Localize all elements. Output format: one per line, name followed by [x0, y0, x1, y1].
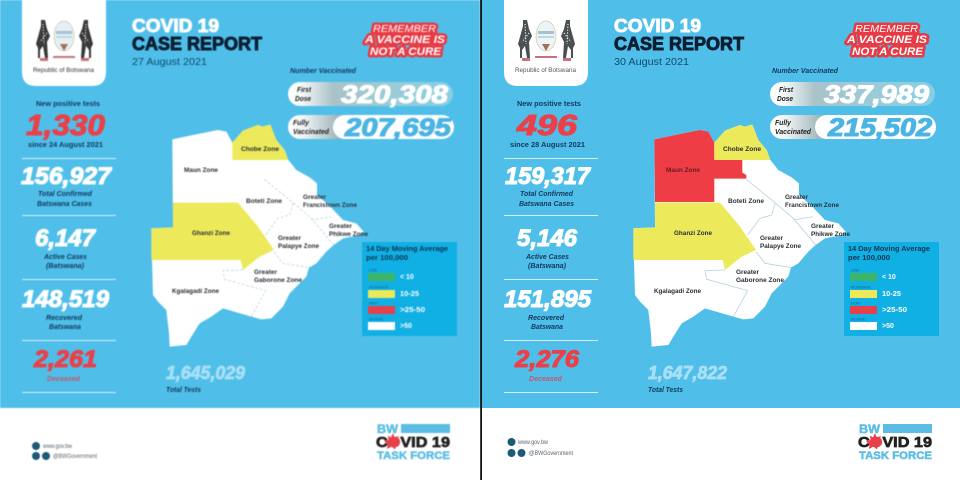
- pill: first dose: 320,308: [341, 81, 448, 109]
- map: Botswana zones: Kgalagadi Zone: [172, 288, 219, 295]
- map: Botswana zones: [633, 125, 850, 347]
- stat: deceased: 2,276: [514, 346, 580, 373]
- footer contacts: [508, 438, 573, 457]
- map: Botswana zones: Palapye Zone: [278, 243, 319, 250]
- callout: vaccine reminder: REMEMBER: [373, 24, 436, 35]
- legend: >25-50: [882, 307, 907, 314]
- stat: new positive tests: 1,330: [26, 110, 105, 142]
- footer contacts: www.gov.bw: [517, 440, 549, 446]
- title: CASE REPORT: [614, 34, 744, 54]
- stat: total confirmed: [21, 163, 113, 208]
- panel: 30 August report: [482, 0, 960, 480]
- stat: recovered: Recovered: [528, 315, 565, 322]
- logo: BW COVID 19 Task Force: BW: [377, 422, 399, 436]
- stat: active cases: 6,147: [35, 225, 97, 252]
- background: blue area: [482, 0, 960, 408]
- crest caption: Republic of Botswana: [33, 68, 95, 74]
- title: COVID 19: [614, 16, 701, 36]
- map: Botswana zones: Greater: [811, 223, 834, 230]
- callout: vaccine reminder: A VACCINE IS: [846, 34, 928, 46]
- stat: deceased: 2,261: [33, 346, 97, 373]
- map: Botswana zones: Chobe Zone: [723, 146, 761, 153]
- stat: new positive tests: since 28 August 2021: [510, 142, 585, 149]
- icon: crest: [518, 20, 575, 61]
- stat: total tests: Total Tests: [648, 387, 683, 394]
- logo: BW COVID 19 Task Force: TASK FORCE: [859, 450, 932, 462]
- stat: active cases: (Batswana): [528, 263, 567, 270]
- legend: 10-25: [400, 291, 419, 298]
- pill: fully vaccinated: Fully: [775, 120, 792, 127]
- stat: total confirmed: 156,927: [21, 163, 113, 190]
- callout: vaccine reminder: [364, 24, 446, 58]
- pill: fully vaccinated: Fully: [293, 120, 310, 127]
- callout: vaccine reminder: NOT A CURE: [370, 46, 442, 58]
- title: [614, 16, 744, 68]
- legend: LOW: [851, 268, 860, 272]
- legend: >50: [882, 323, 894, 330]
- pill: first dose: 337,989: [824, 81, 929, 109]
- map: Botswana zones: Ghanzi Zone: [192, 230, 230, 237]
- pill: first dose: Dose: [777, 96, 793, 103]
- map: Botswana zones: Boteti Zone: [246, 198, 282, 205]
- stat: active cases: Active Cases: [43, 254, 87, 261]
- map: Botswana zones: [151, 125, 368, 347]
- map: Botswana zones: Greater: [329, 223, 352, 230]
- callout: vaccine reminder: A VACCINE IS: [364, 34, 446, 46]
- footer contacts: [32, 442, 97, 460]
- map: Botswana zones: Francistown Zone: [303, 202, 357, 209]
- pill: fully vaccinated: 207,695: [344, 114, 452, 142]
- map: Botswana zones: Francistown Zone: [785, 202, 839, 209]
- map: Botswana zones: Gaborone Zone: [254, 277, 302, 284]
- logo: BW COVID 19 Task Force: TASK FORCE: [377, 450, 450, 462]
- map: Botswana zones: Kgalagadi Zone: [654, 288, 701, 295]
- logo: BW COVID 19 Task Force: [376, 422, 450, 462]
- legend: [362, 242, 457, 336]
- stat: recovered: Batswana: [531, 324, 563, 331]
- stat: total confirmed: Batswana Cases: [519, 201, 574, 208]
- stat: deceased: Deceased: [529, 376, 563, 383]
- legend: per 100,000: [366, 255, 408, 262]
- panel: 27 August report: [0, 0, 480, 480]
- pill: fully vaccinated: Vaccinated: [293, 129, 330, 136]
- pill: first dose: [770, 81, 935, 109]
- stat: deceased: [514, 346, 580, 383]
- footer contacts: @BWGovernment: [529, 451, 573, 457]
- stat: total confirmed: Total Confirmed: [38, 191, 93, 198]
- background: blue area: [0, 0, 480, 408]
- pill: fully vaccinated: [770, 114, 936, 142]
- map: Botswana zones: Boteti Zone: [728, 198, 764, 205]
- map: Botswana zones: Greater: [760, 235, 783, 242]
- legend: HIGH: [369, 302, 378, 306]
- stat: total confirmed: Total Confirmed: [520, 191, 574, 198]
- stat: active cases: [35, 225, 97, 270]
- map: Botswana zones: Ghanzi Zone: [674, 230, 712, 237]
- legend: 14 Day Moving Average: [848, 246, 930, 253]
- stat: recovered: Recovered: [46, 315, 83, 322]
- stat: deceased: [33, 346, 97, 383]
- title: CASE REPORT: [132, 34, 262, 54]
- pill: first dose: First: [297, 87, 312, 94]
- map: Botswana zones: Maun Zone: [666, 167, 700, 174]
- title: [132, 16, 262, 68]
- legend: 10-25: [882, 291, 901, 298]
- number vaccinated: [288, 68, 454, 142]
- legend: 14 Day Moving Average: [366, 246, 448, 253]
- footer band: [0, 408, 480, 480]
- stat: total tests: Total Tests: [166, 387, 201, 394]
- pill: first dose: [288, 81, 453, 109]
- stat: new positive tests: since 24 August 2021: [28, 142, 103, 149]
- map: Botswana zones: Greater: [736, 269, 759, 276]
- logo: BW COVID 19 Task Force: COVID 19: [858, 434, 932, 451]
- pill: fully vaccinated: Vaccinated: [775, 129, 812, 136]
- stat: total tests: [166, 363, 245, 394]
- legend: per 100,000: [848, 255, 890, 262]
- footer contacts: www.gov.bw: [42, 444, 73, 450]
- card: coat of arms: [504, 0, 588, 86]
- logo: BW COVID 19 Task Force: [858, 422, 932, 462]
- stat: total tests: [648, 363, 727, 394]
- title: 30 August 2021: [614, 57, 689, 68]
- legend: SEVERE: [851, 318, 866, 322]
- stat: recovered: Batswana: [49, 324, 81, 331]
- stat: recovered: 151,895: [504, 286, 592, 313]
- map: Botswana zones: Greater: [785, 194, 808, 201]
- legend: MODERATE: [851, 286, 871, 290]
- footer band: [482, 408, 960, 480]
- stat: deceased: Deceased: [47, 376, 81, 383]
- pill: first dose: First: [779, 87, 794, 94]
- callout: vaccine reminder: REMEMBER: [855, 24, 918, 35]
- footer contacts: @BWGovernment: [53, 454, 97, 460]
- stat: new positive tests: [510, 101, 585, 149]
- stat: active cases: [517, 225, 578, 270]
- stat: new positive tests: [26, 101, 105, 149]
- map: Botswana zones: Phikwe Zone: [329, 231, 368, 238]
- stat: total tests: 1,645,029: [166, 363, 245, 383]
- number vaccinated: [770, 68, 936, 142]
- stat: active cases: (Batswana): [46, 263, 85, 270]
- pill: first dose: Dose: [295, 96, 311, 103]
- legend: < 10: [882, 274, 896, 281]
- map: Botswana zones: Phikwe Zone: [811, 231, 850, 238]
- legend: SEVERE: [369, 318, 384, 322]
- number vaccinated: Number Vaccinated: [290, 68, 357, 75]
- stat: active cases: 5,146: [517, 225, 578, 252]
- stat: total confirmed: Batswana Cases: [37, 201, 92, 208]
- stat: recovered: [504, 286, 592, 331]
- map: Botswana zones: Palapye Zone: [760, 243, 801, 250]
- title: 27 August 2021: [132, 57, 207, 68]
- legend: >25-50: [400, 307, 425, 314]
- stat: recovered: 148,519: [22, 286, 110, 313]
- stat: total tests: 1,647,822: [648, 363, 727, 383]
- map: Botswana zones: Greater: [303, 194, 326, 201]
- crest caption: Republic of Botswana: [515, 68, 577, 74]
- legend: < 10: [400, 274, 414, 281]
- card: coat of arms: [22, 0, 106, 86]
- map: Botswana zones: Greater: [254, 269, 277, 276]
- map: Botswana zones: Maun Zone: [184, 167, 218, 174]
- map: Botswana zones: Gaborone Zone: [736, 277, 784, 284]
- logo: BW COVID 19 Task Force: BW: [859, 422, 881, 436]
- stat: new positive tests: New positive tests: [36, 101, 100, 108]
- legend: LOW: [369, 268, 378, 272]
- icon: crest: [36, 20, 93, 61]
- logo: BW COVID 19 Task Force: COVID 19: [376, 434, 450, 451]
- title: COVID 19: [132, 16, 219, 36]
- stat: recovered: [22, 286, 110, 331]
- legend: >50: [400, 323, 412, 330]
- pill: fully vaccinated: 215,502: [827, 114, 932, 142]
- map: Botswana zones: Greater: [278, 235, 301, 242]
- page divider: [480, 0, 482, 480]
- legend: MODERATE: [369, 286, 389, 290]
- map: Botswana zones: Chobe Zone: [241, 146, 279, 153]
- callout: vaccine reminder: NOT A CURE: [852, 46, 924, 58]
- number vaccinated: Number Vaccinated: [772, 68, 839, 75]
- legend: [844, 242, 939, 336]
- stat: total confirmed: [505, 163, 592, 208]
- stat: new positive tests: New positive tests: [517, 101, 581, 108]
- callout: vaccine reminder: [846, 24, 928, 58]
- pill: fully vaccinated: [288, 114, 454, 142]
- legend: HIGH: [851, 302, 860, 306]
- stat: total confirmed: 159,317: [505, 163, 592, 190]
- stat: new positive tests: 496: [516, 110, 578, 142]
- stat: active cases: Active Cases: [525, 254, 569, 261]
